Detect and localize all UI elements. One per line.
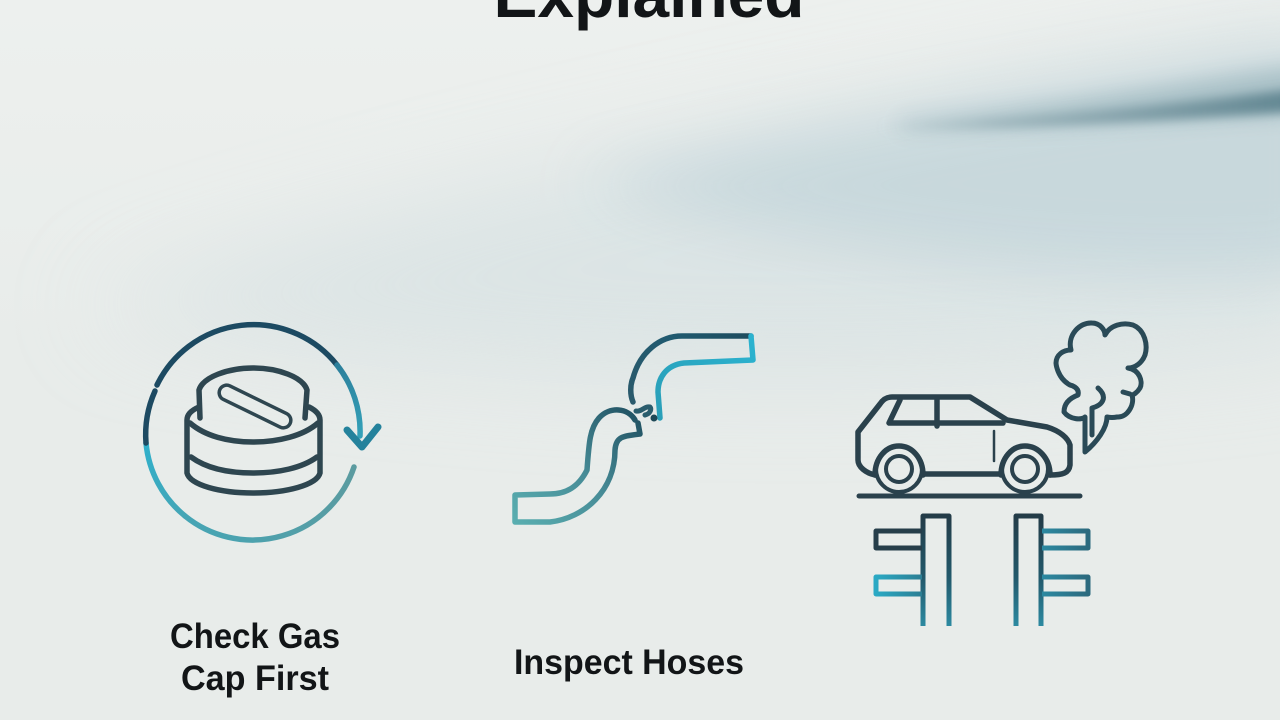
label: Check Gas Cap First xyxy=(170,617,340,698)
icon: cracked hose xyxy=(515,336,753,522)
crack fragments xyxy=(636,407,651,415)
label: Check Gas Cap First: Cap First xyxy=(181,659,329,698)
label: Check Gas Cap First: Check Gas xyxy=(170,617,340,656)
circular arrow xyxy=(146,325,378,540)
lift arms xyxy=(876,531,1088,594)
lift posts xyxy=(923,516,1041,626)
fuel cap xyxy=(187,368,320,493)
upper hose section xyxy=(631,336,751,402)
lower hose section xyxy=(515,410,640,522)
icon: car on lift with smoke xyxy=(858,323,1146,626)
label: Inspect Hoses: Inspect Hoses xyxy=(514,643,744,682)
car xyxy=(858,397,1080,496)
icon: gas cap with circular arrow xyxy=(146,325,378,540)
smoke cloud xyxy=(1056,323,1146,452)
